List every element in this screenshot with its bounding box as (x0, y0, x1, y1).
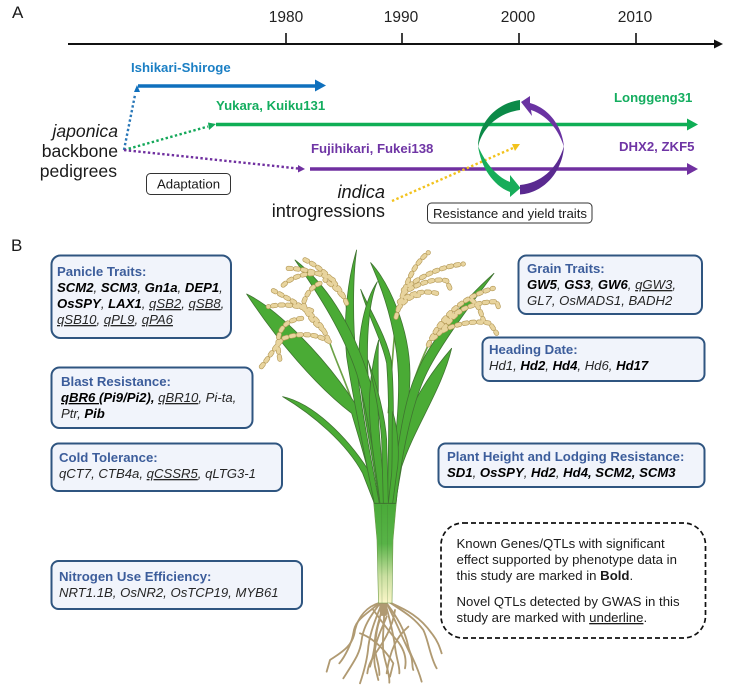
heading: nitrogen use efficiency: Nitrogen Use Efficiency: (59, 569, 211, 584)
label: panel B: B (11, 236, 22, 255)
panel: grain traits (518, 256, 702, 314)
heading: panicle traits: Panicle Traits: (57, 264, 146, 279)
circular cycle arrows (478, 96, 564, 197)
indica introgressions label: indica (337, 182, 385, 202)
japonica backbone pedigrees label: pedigrees (40, 161, 117, 181)
timeline axis: 2010 (618, 9, 653, 26)
legend: bold and underline key: study are marked with underline. (456, 610, 647, 625)
heading: grain traits: Grain Traits: (527, 261, 605, 276)
heading: blast resistance: Blast Resistance: (61, 374, 171, 389)
timeline axis (68, 9, 723, 48)
japonica backbone pedigrees label: japonica (50, 121, 118, 141)
gene list: blast resistance: Ptr, Pib (61, 406, 105, 421)
adaptation label box: Adaptation (157, 176, 220, 192)
gene list: heading date: Hd1, Hd2, Hd4, Hd6, Hd17 (489, 358, 649, 373)
label: panel A: A (12, 3, 24, 22)
panel: plant height and lodging resistance (438, 444, 704, 487)
gene list: nitrogen use efficiency: NRT1.1B, OsNR2, OsTCP19, MYB61 (59, 585, 279, 600)
purple pedigree arrow: Fujihikari to DHX2: Fujihikari, Fukei138 (311, 141, 433, 156)
gene list: cold tolerance: qCT7, CTB4a, qCSSR5, qLTG3-1 (59, 466, 256, 481)
panel: heading date (482, 338, 704, 381)
green pedigree arrow: Yukara to Longgeng31 (124, 90, 698, 150)
roots (327, 603, 442, 683)
timeline axis: 1980 (269, 9, 304, 26)
panel: cold tolerance (52, 444, 282, 491)
japonica backbone pedigrees label: backbone (42, 141, 118, 161)
purple pedigree arrow: Fujihikari to DHX2 (124, 139, 698, 175)
panel: panicle traits (52, 256, 231, 338)
gene list: grain traits: GW5, GS3, GW6, qGW3, (527, 277, 676, 292)
blue pedigree arrow: Ishikari-Shiroge: Ishikari-Shiroge (131, 60, 231, 75)
panel: nitrogen use efficiency (52, 561, 302, 609)
green pedigree arrow: Yukara to Longgeng31: Yukara, Kuiku131 (216, 98, 325, 113)
gene list: panicle traits: OsSPY, LAX1, qSB2, qSB8, (57, 296, 224, 311)
indica introgressions label: introgressions (272, 201, 385, 221)
rice plant illustration (247, 250, 498, 683)
blue pedigree arrow: Ishikari-Shiroge (124, 60, 326, 150)
adaptation label box (146, 174, 230, 194)
legend: bold and underline key: effect supported by phenotype data in (456, 552, 677, 567)
legend: bold and underline key: this study are marked in Bold. (456, 568, 633, 583)
legend: bold and underline key: Known Genes/QTLs with significant (456, 536, 665, 551)
heading: plant height and lodging resistance: Plant Height and Lodging Resistance: (447, 449, 684, 464)
legend: bold and underline key (441, 523, 706, 638)
panel: blast resistance (52, 368, 252, 428)
gene list: blast resistance: qBR6 (Pi9/Pi2), qBR10, Pi-ta, (61, 390, 236, 405)
yellow introgression arrow (392, 144, 520, 201)
heading: heading date: Heading Date: (489, 342, 578, 357)
legend: bold and underline key: Novel QTLs detected by GWAS in this (456, 594, 680, 609)
purple pedigree arrow: Fujihikari to DHX2: DHX2, ZKF5 (619, 139, 694, 154)
timeline axis: 2000 (501, 9, 536, 26)
gene list: panicle traits: SCM2, SCM3, Gn1a, DEP1, (57, 280, 223, 295)
timeline axis: 1990 (384, 9, 419, 26)
heading: cold tolerance: Cold Tolerance: (59, 450, 158, 465)
gene list: plant height and lodging resistance: SD1, OsSPY, Hd2, Hd4, SCM2, SCM3 (447, 465, 676, 480)
resistance and yield traits label box: Resistance and yield traits (433, 206, 587, 221)
green pedigree arrow: Yukara to Longgeng31: Longgeng31 (614, 90, 692, 105)
leaves and panicles (247, 250, 498, 503)
gene list: panicle traits: qSB10, qPL9, qPA6 (57, 312, 173, 327)
stem (373, 495, 397, 603)
gene list: grain traits: GL7, OsMADS1, BADH2 (527, 293, 673, 308)
